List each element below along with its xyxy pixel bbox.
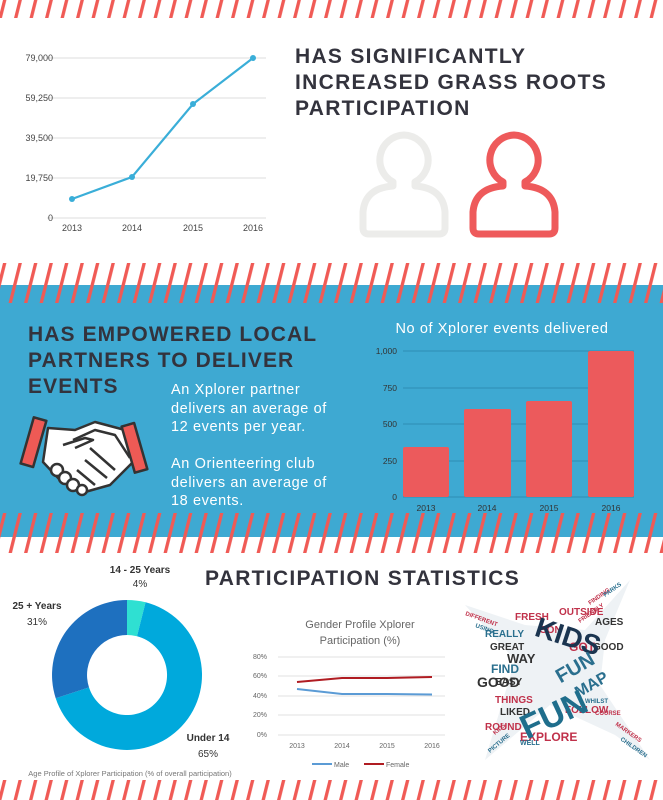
word cloud: EXPLORE [520, 730, 577, 744]
word cloud: WHILST [585, 699, 608, 705]
word cloud: FIND [491, 662, 519, 676]
line chart: participation: 59,250 [25, 93, 53, 103]
line chart: gender profile: 2013 [289, 743, 305, 750]
word cloud: MARKERS [614, 722, 642, 744]
word cloud: MAP [572, 669, 612, 701]
icon: grey person [360, 132, 448, 238]
icon: red person [470, 132, 558, 238]
word cloud: EASY [495, 677, 523, 688]
word cloud: WELL [520, 740, 541, 747]
text: partner stats: An Orienteering club delivers an average of 18 events. [171, 456, 327, 509]
heading: grass roots: INCREASED GRASS ROOTS [295, 71, 607, 94]
word cloud: PARKS [603, 582, 623, 599]
line chart: gender profile: 20% [253, 712, 267, 719]
word cloud: THINGS [495, 695, 533, 706]
line chart: gender profile: 60% [253, 673, 267, 680]
line chart: gender profile: 2015 [379, 743, 395, 750]
word cloud: DIFFERENT [464, 611, 498, 629]
word cloud: FRESH [515, 612, 549, 623]
bar chart: events delivered: No of Xplorer events delivered [395, 321, 609, 337]
word cloud: GREAT [490, 642, 524, 653]
word cloud: USING [474, 623, 495, 635]
line chart: gender profile: Gender Profile Xplorer [305, 619, 415, 631]
text: partner stats [171, 382, 327, 509]
word cloud: FRIENDLY [578, 603, 605, 625]
bar chart: events delivered: 250 [383, 456, 397, 466]
line chart: gender profile: Participation (%) [320, 635, 400, 647]
word cloud: FOLLOW [565, 705, 609, 716]
word cloud: LIKED [500, 707, 530, 718]
line chart: gender profile: Female [386, 762, 409, 769]
bar chart: events delivered: 2016 [602, 503, 621, 513]
bar chart: events delivered: 500 [383, 419, 397, 429]
heading: participation statistics: PARTICIPATION STATISTICS [205, 567, 520, 590]
line chart: participation: 19,750 [25, 173, 53, 183]
donut chart: age profile: 25 + Years [12, 601, 62, 612]
blue band background [0, 285, 663, 537]
line chart: gender profile: 2016 [424, 743, 440, 750]
line chart: participation [25, 53, 266, 233]
word cloud: COURSE [595, 711, 621, 717]
heading: grass roots: PARTICIPATION [295, 97, 471, 120]
line chart: participation: 79,000 [25, 53, 53, 63]
word cloud: FINDING [588, 587, 612, 607]
word cloud: KIDS [492, 723, 507, 737]
line chart: participation: 2015 [183, 223, 203, 233]
donut chart: age profile: 14 - 25 Years [110, 565, 171, 576]
word cloud: ROUND [485, 722, 522, 733]
heading: empowered partners [28, 323, 317, 398]
line chart: participation: 2013 [62, 223, 82, 233]
line chart: gender profile: 2014 [334, 743, 350, 750]
word cloud: SON [540, 625, 562, 636]
line chart: gender profile: 0% [257, 732, 267, 739]
word cloud: OUTSIDE [559, 607, 604, 618]
icon: handshake [19, 416, 149, 496]
word cloud: CHILDREN [619, 737, 648, 759]
stripe band 2 [0, 263, 663, 303]
heading: grass roots [295, 45, 607, 120]
stripe band bottom [0, 780, 658, 800]
bar chart: events delivered [376, 321, 634, 513]
bar chart: events delivered: 2013 [417, 503, 436, 513]
word cloud: PICTURE [487, 733, 511, 755]
word cloud: REALLY [485, 629, 524, 640]
word cloud: GOOD [593, 642, 624, 653]
heading: empowered partners: EVENTS [28, 375, 119, 398]
word cloud: WAY [507, 651, 536, 666]
word cloud: KIDS [532, 611, 605, 662]
line chart: participation: 39,500 [25, 133, 53, 143]
stripe band top [0, 0, 658, 18]
line chart: participation: 2016 [243, 223, 263, 233]
word cloud: GOT [569, 640, 596, 654]
bar chart: events delivered: 750 [383, 383, 397, 393]
line chart: gender profile [253, 619, 445, 769]
word cloud [464, 581, 650, 760]
donut chart: age profile: 31% [27, 617, 47, 628]
line chart: gender profile: 80% [253, 654, 267, 661]
bar chart: events delivered: 2015 [540, 503, 559, 513]
line chart: participation: 2014 [122, 223, 142, 233]
word cloud: GOOD [477, 674, 520, 690]
donut chart: age profile: 65% [198, 749, 218, 760]
word cloud: FUN [514, 683, 594, 747]
line chart: gender profile: 40% [253, 693, 267, 700]
word cloud: FUN [552, 648, 599, 688]
donut chart: age profile: Age Profile of Xplorer Participation (% of overall participation) [28, 769, 232, 778]
heading: empowered partners: PARTNERS TO DELIVER [28, 349, 294, 372]
bar chart: events delivered: 1,000 [376, 346, 397, 356]
word cloud: AGES [595, 617, 624, 628]
text: partner stats: An Xplorer partner delivers an average of 12 events per year. [171, 382, 327, 435]
bar chart: events delivered: 0 [392, 492, 397, 502]
donut chart: age profile [12, 565, 232, 778]
donut chart: age profile: 4% [133, 579, 147, 590]
donut chart: age profile: Under 14 [187, 733, 230, 744]
heading: grass roots: HAS SIGNIFICANTLY [295, 45, 526, 68]
stripe band 3 [0, 513, 663, 553]
line chart: participation: 0 [48, 213, 53, 223]
bar chart: events delivered: 2014 [478, 503, 497, 513]
heading: empowered partners: HAS EMPOWERED LOCAL [28, 323, 317, 346]
line chart: gender profile: Male [334, 762, 349, 769]
